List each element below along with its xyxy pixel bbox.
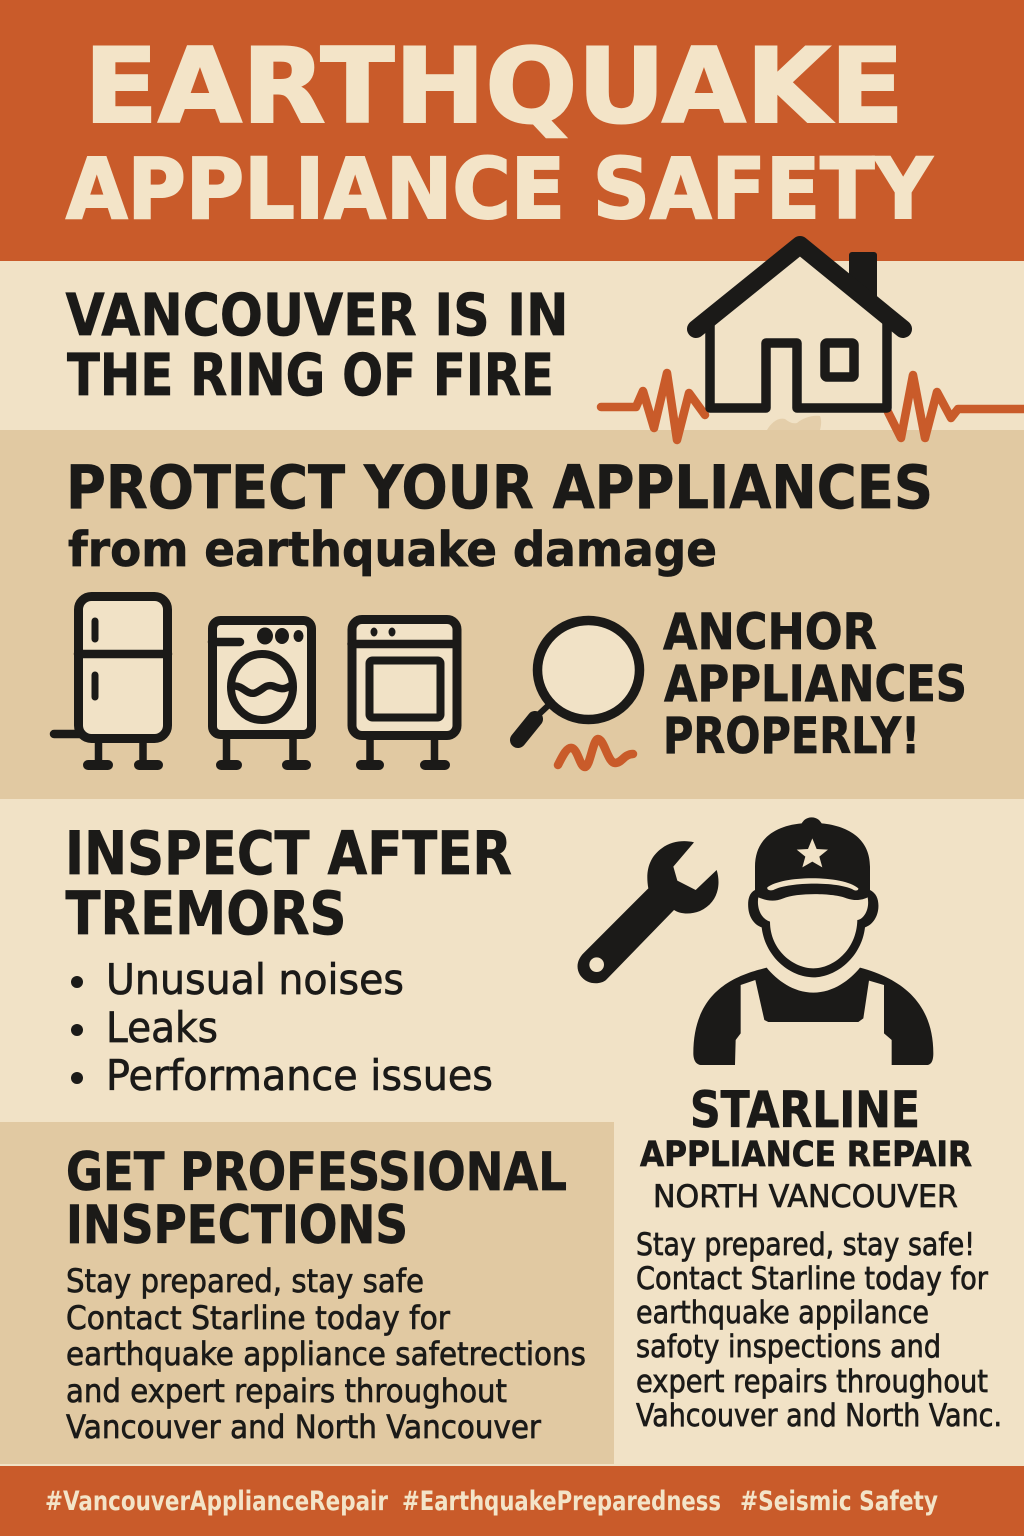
- callout: anchor appliances properly: [663, 603, 967, 765]
- checklist: what to look for: Unusual noises: [106, 955, 404, 1004]
- heading: protect your appliances: from earthquake damage: [68, 522, 717, 578]
- heading: Vancouver is in the ring of fire: THE RING OF FIRE: [67, 341, 554, 409]
- text block: inspection message: [66, 1262, 586, 1446]
- text block: inspection message: and expert repairs throughout: [66, 1372, 507, 1410]
- heading: protect your appliances: PROTECT YOUR APPLIANCES: [66, 453, 933, 523]
- heading: Vancouver is in the ring of fire: VANCOUVER IS IN: [66, 281, 568, 349]
- brand: Starline Appliance Repair North Vancouver: APPLIANCE REPAIR: [640, 1135, 972, 1175]
- footer: hashtags: #VancouverApplianceRepair: [45, 1486, 389, 1517]
- heading: inspect after tremors: INSPECT AFTER: [65, 819, 512, 889]
- footer: hashtags: [0, 1466, 1024, 1536]
- heading: inspect after tremors: [65, 819, 512, 949]
- heading: get professional inspections: GET PROFESSIONAL: [66, 1142, 567, 1203]
- text block: contact message: [636, 1227, 1002, 1434]
- icon: wrench: [578, 841, 719, 983]
- icon: oven: [352, 620, 457, 765]
- heading: protect your appliances: [66, 453, 933, 578]
- panel: get professional inspections: [0, 1122, 614, 1464]
- title: [66, 27, 933, 238]
- footer: hashtags: #EarthquakePreparedness: [402, 1486, 721, 1517]
- callout: anchor appliances properly: PROPERLY!: [663, 707, 920, 765]
- callout: anchor appliances properly: ANCHOR: [663, 603, 877, 661]
- panel: ring of fire: [0, 261, 1024, 430]
- text block: inspection message: Stay prepared, stay safe: [66, 1262, 424, 1300]
- footer: hashtags: #Seismic Safety: [740, 1486, 938, 1517]
- text block: contact message: safoty inspections and: [636, 1329, 941, 1365]
- text block: contact message: earthquake appilance: [636, 1295, 929, 1331]
- text block: inspection message: earthquake appliance safetrections: [66, 1335, 586, 1373]
- icon: refrigerator: [54, 596, 168, 765]
- panel: title header: [0, 0, 1024, 261]
- icon: house with seismic waves: [601, 245, 1024, 440]
- heading: get professional inspections: [66, 1142, 567, 1256]
- brand: Starline Appliance Repair North Vancouver: NORTH VANCOUVER: [653, 1179, 958, 1215]
- panel: protect your appliances: [0, 430, 1024, 799]
- panel: inspect after tremors: [0, 799, 1024, 1466]
- text block: inspection message: Contact Starline today for: [66, 1299, 451, 1337]
- callout: anchor appliances properly: APPLIANCES: [664, 655, 967, 713]
- brand: Starline Appliance Repair North Vancouver: STARLINE: [690, 1081, 920, 1139]
- title: APPLIANCE SAFETY: [66, 140, 933, 238]
- heading: inspect after tremors: TREMORS: [66, 879, 346, 949]
- icon: tremor squiggle: [558, 739, 633, 767]
- icon: magnifying glass: [518, 620, 640, 740]
- heading: get professional inspections: INSPECTIONS: [66, 1195, 408, 1256]
- brand: Starline Appliance Repair North Vancouver: [640, 1081, 972, 1215]
- text block: inspection message: Vancouver and North Vancouver: [66, 1408, 542, 1446]
- heading: Vancouver is in the ring of fire: [66, 281, 568, 409]
- icon: washing machine: [212, 620, 312, 765]
- icon: repair technician: [693, 817, 933, 1065]
- title: EARTHQUAKE: [84, 27, 904, 147]
- checklist: what to look for: Leaks: [106, 1003, 218, 1052]
- checklist: what to look for: [71, 955, 493, 1100]
- checklist: what to look for: Performance issues: [106, 1051, 493, 1100]
- text block: contact message: Stay prepared, stay safe!: [636, 1227, 975, 1263]
